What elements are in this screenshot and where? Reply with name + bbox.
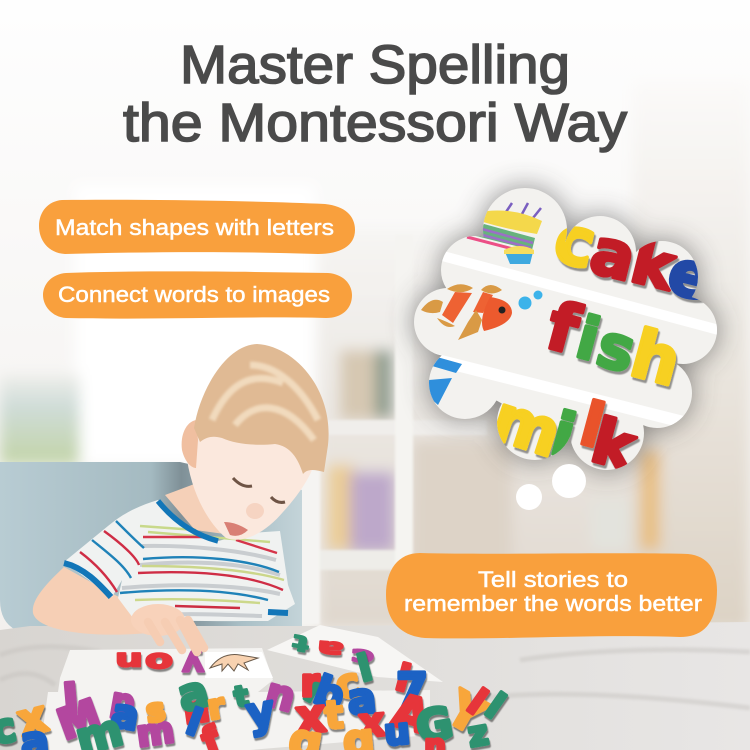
nose <box>246 503 264 519</box>
wooden letters pile: x <box>293 688 328 744</box>
callout: connect words <box>43 271 352 319</box>
wooden letters pile: r <box>301 661 320 705</box>
wooden letters pile: a <box>345 673 378 724</box>
wooden letters pile: A <box>387 683 436 744</box>
icon: clownfish <box>421 284 542 340</box>
card bands <box>428 250 720 432</box>
hair highlights <box>212 365 318 440</box>
word: fish: h <box>623 315 688 402</box>
neck <box>165 480 232 535</box>
word: fish <box>548 300 678 390</box>
hair <box>194 344 329 474</box>
word: cake: c <box>547 200 603 284</box>
wooden letters pile <box>0 647 511 750</box>
wooden letters pile: x <box>13 691 52 747</box>
callout: match shapes: Match shapes with letters <box>55 215 334 240</box>
wooden letters pile: t <box>232 679 251 714</box>
wooden letters pile: n <box>261 670 300 721</box>
wooden letters pile: t <box>323 692 345 738</box>
wooden letters pile: n <box>181 689 212 733</box>
callout: tell stories: remember the words better <box>404 591 702 616</box>
word: fish: f <box>539 287 588 370</box>
word: milk: m <box>483 382 570 473</box>
wooden letters pile: a <box>108 690 143 740</box>
word: milk <box>497 398 640 469</box>
thought bubbles <box>516 464 586 510</box>
word: cake: e <box>661 235 719 316</box>
wooden letters pile: s <box>143 690 168 730</box>
face <box>186 395 328 540</box>
callout: match shapes <box>39 200 355 254</box>
wooden letters pile: l <box>478 686 511 727</box>
icon: milk carton corner <box>428 357 462 405</box>
word: cake: k <box>624 224 684 305</box>
title <box>123 35 627 153</box>
card word: pupy: y <box>182 648 204 681</box>
card word: cat: a <box>316 635 345 662</box>
wooden letters pile: c <box>332 659 363 709</box>
card word: pupy: n <box>115 647 143 676</box>
thought cloud <box>414 188 717 470</box>
wooden letters pile: l <box>354 647 376 690</box>
word: cake <box>555 226 704 304</box>
wooden letters pile: a <box>172 666 214 722</box>
wooden letters pile: Y <box>436 680 496 747</box>
word: milk: l <box>573 389 611 462</box>
word: milk: i <box>544 399 582 472</box>
callout: tell stories: Tell stories to <box>478 567 628 592</box>
t-shirt <box>64 500 295 621</box>
icon: cake <box>467 203 542 264</box>
wooden letters pile: l <box>181 702 207 745</box>
wooden letters pile: r <box>204 686 228 728</box>
thought cloud shadow <box>414 188 717 470</box>
icon: hand outline <box>210 655 258 671</box>
ear <box>182 420 198 468</box>
card word: pupy: o <box>145 644 173 675</box>
callout: connect words: Connect words to images <box>58 282 330 307</box>
card word: cat: t <box>291 629 311 657</box>
title: the Montessori Way <box>123 93 627 153</box>
wooden letters pile: J <box>58 673 81 724</box>
word: milk: k <box>584 404 645 485</box>
wooden letters pile: x <box>357 699 387 747</box>
card word: pupy <box>115 644 204 681</box>
word: fish: i <box>570 303 607 374</box>
wooden letters pile: b <box>308 667 351 720</box>
wooden letters pile: p <box>108 680 137 722</box>
callout: tell stories <box>386 553 717 638</box>
wooden letters pile: l <box>392 657 414 700</box>
eyes <box>233 478 285 502</box>
wooden letters pile: M <box>51 689 107 750</box>
mouth <box>224 522 248 536</box>
child's hand <box>131 604 204 652</box>
puzzle cards <box>40 625 443 750</box>
wooden letters pile: l <box>460 682 493 723</box>
child <box>33 344 329 635</box>
wooden letters pile: 7 <box>396 663 428 717</box>
arm <box>33 567 165 635</box>
word: cake: a <box>583 214 643 297</box>
wooden letters pile: l <box>297 670 328 711</box>
table <box>0 622 750 750</box>
title: Master Spelling <box>180 35 570 95</box>
card word: cat: c <box>350 644 375 670</box>
word: fish: s <box>590 310 642 387</box>
wooden letters pile: y <box>243 685 278 738</box>
chair <box>0 462 302 630</box>
card word: cat <box>291 629 375 670</box>
